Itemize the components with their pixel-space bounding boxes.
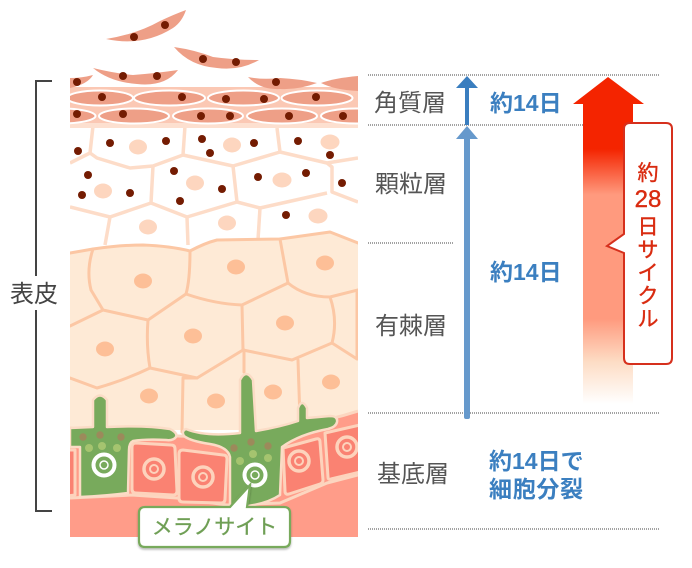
- arrow: lower blue: [456, 126, 478, 419]
- flaking cells: [70, 10, 358, 91]
- arrow: 28 day cycle: [573, 77, 644, 404]
- layer labels: 有棘層: [375, 313, 447, 340]
- granular layer: [70, 124, 358, 249]
- callout: 28 day cycle: 28: [635, 186, 661, 213]
- callout: melanocyte: [139, 485, 290, 547]
- spinous layer: [70, 232, 358, 432]
- duration labels: [489, 90, 584, 502]
- duration labels: 約14日: [490, 259, 562, 285]
- duration labels: 細胞分裂: [489, 476, 584, 502]
- stratum corneum: [70, 87, 358, 128]
- callout: 28 day cycle: ル: [638, 308, 658, 331]
- layer labels: 顆粒層: [375, 171, 447, 198]
- melanocyte right: [183, 374, 337, 507]
- callout: 28 day cycle: サ: [638, 239, 658, 262]
- callout: 28 day cycle: ク: [638, 285, 658, 308]
- layer labels: 基底層: [377, 461, 449, 488]
- arrow: upper blue: [456, 76, 478, 125]
- duration labels: 約14日: [490, 90, 562, 116]
- melanocyte left: [70, 396, 176, 497]
- duration labels: 約14日で: [489, 448, 584, 474]
- basal layer: [60, 411, 360, 537]
- panel: skin cross-section: [70, 10, 358, 537]
- callout: 28 day cycle: [607, 123, 672, 364]
- callout: 28 day cycle: 約: [638, 162, 658, 185]
- dotted layer lines: [368, 75, 659, 529]
- layer labels: 角質層: [374, 90, 446, 117]
- bracket: epidermis: 表皮: [10, 281, 58, 308]
- layer labels: [374, 90, 449, 488]
- pigment dots: [73, 21, 347, 219]
- callout: 28 day cycle: イ: [638, 262, 658, 285]
- callout: 28 day cycle: 日: [638, 216, 658, 239]
- callout: melanocyte: メラノサイト: [152, 516, 277, 539]
- bracket: epidermis: [6, 81, 62, 511]
